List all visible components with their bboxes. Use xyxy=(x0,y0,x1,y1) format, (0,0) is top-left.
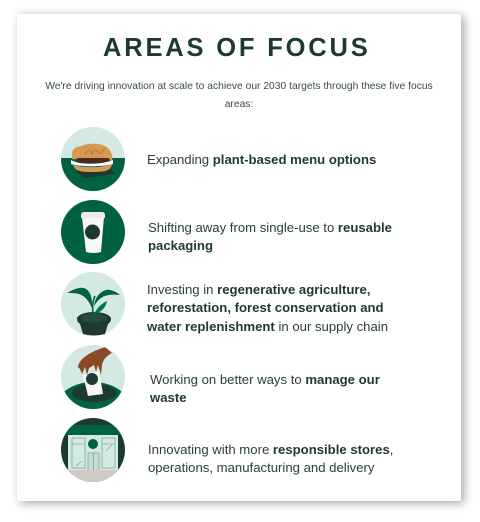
intro text: We're driving innovation at scale to achieve our 2030 targets through these five focus xyxy=(45,81,433,92)
text: regenerative agriculture: water replenishment in our supply chain xyxy=(147,319,388,334)
text: responsible stores: operations, manufacturing and delivery xyxy=(148,460,374,475)
icon: reusable cup xyxy=(61,200,125,264)
title: AREAS OF FOCUS xyxy=(103,34,371,62)
text: reusable packaging: Shifting away from single-use to reusable xyxy=(148,220,392,235)
text: responsible stores xyxy=(148,442,393,475)
text: manage waste xyxy=(150,372,380,405)
text: regenerative agriculture: reforestation, forest conservation and xyxy=(147,300,384,315)
intro text xyxy=(45,81,433,110)
icon: seedling in pot xyxy=(61,272,125,336)
intro text: areas: xyxy=(225,99,253,110)
text: regenerative agriculture: Investing in regenerative agriculture, xyxy=(147,282,370,296)
text: plant-based menu options: Expanding plant-based menu options xyxy=(147,152,376,167)
icon: hand placing cup in waste xyxy=(61,345,125,409)
text: responsible stores: Innovating with more responsible stores, xyxy=(148,442,393,457)
text: reusable packaging: packaging xyxy=(148,238,213,253)
text: regenerative agriculture xyxy=(147,282,388,334)
text: manage waste: waste xyxy=(150,390,187,405)
icon: plant-based sandwich xyxy=(61,127,125,191)
text: manage waste: Working on better ways to manage our xyxy=(150,372,380,387)
text: reusable packaging xyxy=(148,220,392,253)
icon: responsible store xyxy=(61,418,125,482)
